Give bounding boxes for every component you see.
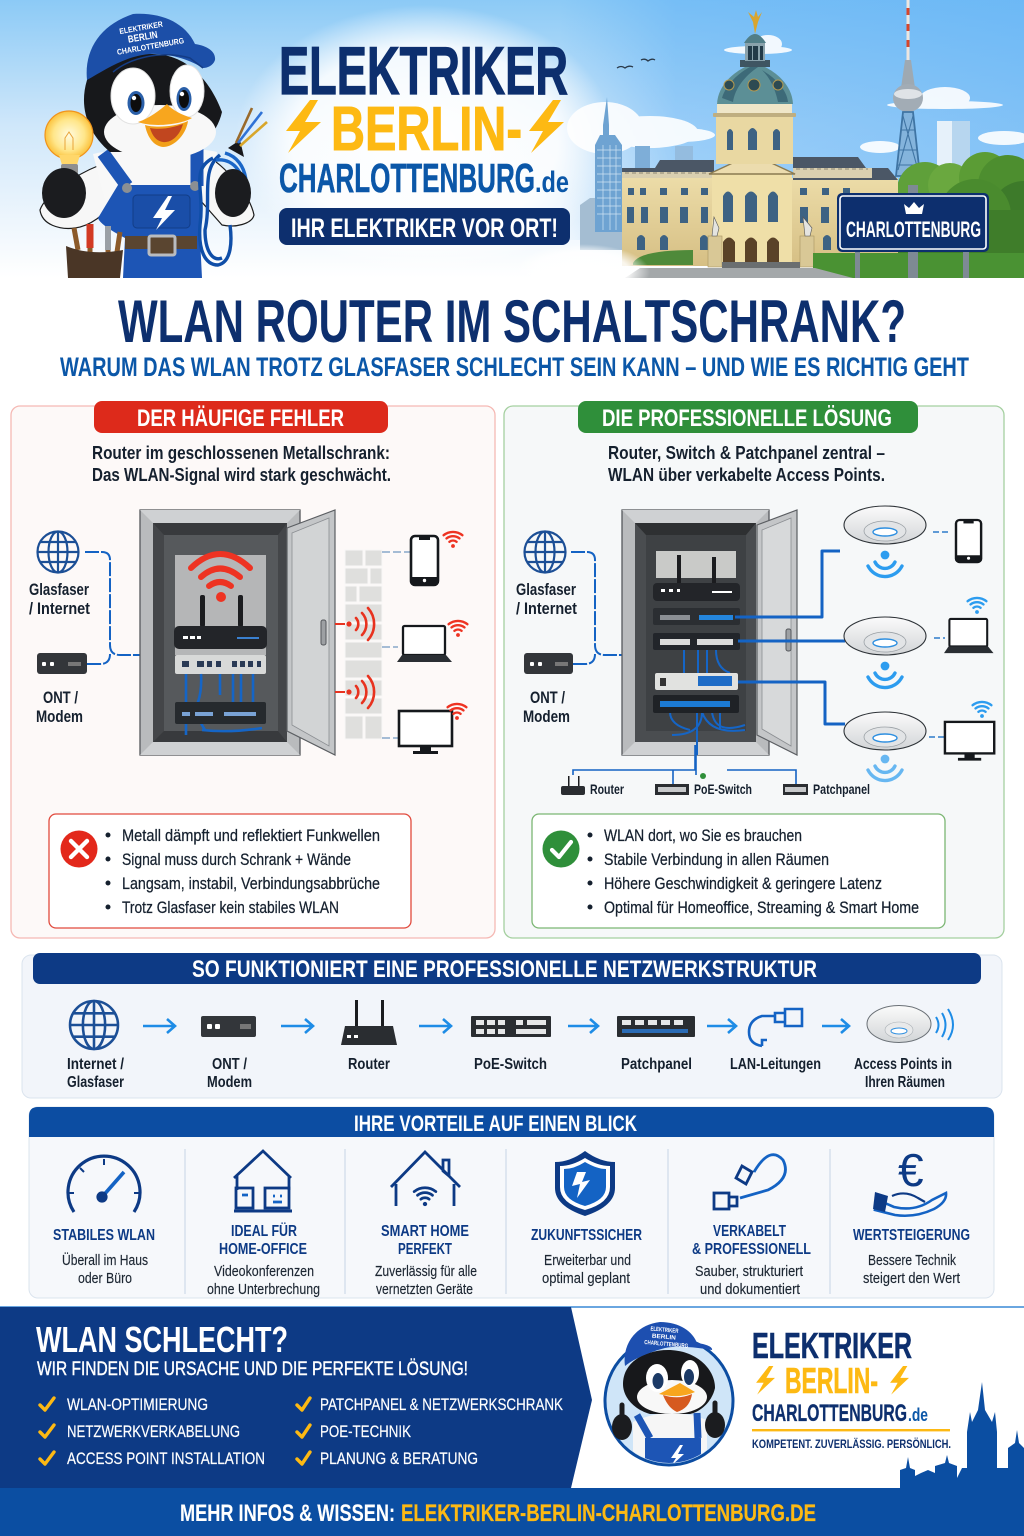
description: [62, 1251, 148, 1287]
heading: & PROFESSIONELL: [692, 1241, 811, 1258]
mansard roofs: [622, 157, 898, 180]
service list right: POE-TECHNIK: [320, 1422, 412, 1441]
heading: [381, 1223, 469, 1258]
clouds: [567, 35, 1024, 154]
description: Zuverlässig für alle: [375, 1263, 477, 1280]
description: optimal geplant: [542, 1270, 631, 1287]
panel: die professionelle Lösung: [504, 401, 1004, 938]
label: Access Points: Access Points in: [854, 1056, 952, 1073]
sky background: [0, 0, 1024, 278]
router with antennas: [174, 595, 267, 649]
bullet list: Optimal für Homeoffice, Streaming & Smart Home: [604, 898, 919, 917]
heading: HOME-OFFICE: [219, 1241, 307, 1258]
panel background: [22, 955, 1002, 1098]
icon: shield: [555, 1151, 615, 1216]
red wifi symbol: [191, 554, 250, 602]
logo: Charlottenburg: CHARLOTTENBURG: [752, 1400, 907, 1427]
castle: [622, 10, 898, 267]
icon: smart home: [391, 1152, 460, 1206]
logo: lightning left: [756, 1366, 775, 1395]
signal 2: [868, 662, 902, 688]
icon: gauge: [68, 1156, 140, 1212]
wing facades: [622, 178, 898, 266]
icon: euro and hand: €: [898, 1144, 924, 1196]
TV tower: [893, 0, 923, 176]
description: vernetzten Geräte: [376, 1281, 473, 1298]
panel: Vorteile: [29, 1107, 994, 1298]
description: [375, 1263, 477, 1298]
metal cabinet: [140, 510, 335, 755]
heading: VERKABELT: [713, 1223, 786, 1240]
icon: wifi phone: [444, 532, 462, 548]
heading: IDEAL FÜR: [231, 1221, 297, 1240]
description: Überall im Haus: [62, 1251, 148, 1269]
logo: lightning right: [529, 100, 564, 153]
cap lettering: ELEKTRIKER: [119, 20, 164, 36]
dark switch: [653, 695, 739, 713]
doors: [723, 238, 779, 262]
penguin mascot: [40, 14, 267, 278]
logo: Elektriker: ELEKTRIKER: [279, 33, 568, 109]
icon: ONT modem: [37, 653, 87, 674]
signal 3: [868, 755, 902, 781]
dome: [717, 67, 793, 104]
badge: der häufige Fehler: [94, 401, 388, 433]
icon: wifi monitor: [448, 704, 466, 720]
icon: Patchpanel: [617, 1016, 695, 1037]
city skyline behind castle: [580, 97, 970, 250]
yellow rule: [752, 1429, 950, 1431]
dashed device lines: [929, 532, 950, 737]
description: [542, 1252, 631, 1287]
service list right: PLANUNG & BERATUNG: [320, 1449, 478, 1468]
Charlottenburg sign: [837, 185, 989, 278]
checkmarks: [40, 1398, 310, 1464]
benefit: Wertsteigerung: [853, 1144, 970, 1287]
description: [695, 1263, 804, 1298]
birds: [617, 59, 655, 68]
logo: .de: .de: [535, 166, 569, 199]
network cabinet: [622, 510, 797, 755]
connection lines: [571, 552, 622, 664]
panel background: [504, 406, 1004, 938]
badge: der häufige Fehler: DER HÄUFIGE FEHLER: [137, 405, 344, 432]
label: ONT / Modem: [207, 1056, 252, 1091]
label: Glasfaser / Internet: / Internet: [29, 599, 90, 618]
blue cables: [186, 674, 262, 735]
door: [757, 510, 797, 755]
website link: ELEKTRIKER-BERLIN-CHARLOTTENBURG.DE: [401, 1500, 816, 1527]
section heading: SO FUNKTIONIERT EINE PROFESSIONELLE NETZWERKSTRUKTUR: [192, 956, 817, 983]
intro text: Das WLAN-Signal wird stark geschwächt.: [92, 465, 391, 485]
badge: die professionelle Lösung: DIE PROFESSIONELLE LÖSUNG: [602, 405, 892, 432]
icon: LAN cable: [749, 1009, 802, 1046]
bullet list: Signal muss durch Schrank + Wände: [122, 850, 351, 869]
label: ONT / Modem: Modem: [207, 1074, 252, 1091]
label: LAN-Leitungen: LAN-Leitungen: [730, 1056, 821, 1073]
light bulb: [45, 111, 93, 174]
icon: PoE-Switch: [471, 1016, 551, 1037]
cap lettering: BERLIN: [127, 30, 159, 46]
bullet list: [588, 826, 919, 917]
central pavilion: [712, 172, 792, 266]
panel background: [11, 406, 495, 938]
intro text: Router, Switch & Patchpanel zentral –: [608, 443, 885, 463]
mascot badge: ELEKTRIKER: [650, 1326, 679, 1335]
bullet list: Höhere Geschwindigkeit & geringere Latenz: [604, 874, 882, 893]
label: Internet / Glasfaser: Internet /: [67, 1056, 124, 1073]
label: ONT / Modem: Modem: [523, 707, 570, 726]
icon: ONT modem: [524, 653, 573, 674]
left glove: [42, 168, 86, 218]
label: ONT / Modem: ONT /: [530, 688, 565, 707]
bullet list: Stabile Verbindung in allen Räumen: [604, 850, 829, 869]
benefit: zukunftssicher: [531, 1151, 642, 1287]
bullet list: Langsam, instabil, Verbindungsabbrüche: [122, 874, 380, 893]
router shelf: [653, 551, 740, 601]
heading: SMART HOME: [381, 1223, 469, 1240]
windows: [627, 128, 868, 250]
callout: problems: [49, 814, 411, 928]
cap: [87, 14, 215, 80]
logo wordmark: [279, 33, 570, 245]
service list left: NETZWERKVERKABELUNG: [67, 1422, 240, 1441]
icon: house with desk: [234, 1151, 292, 1211]
heading: ZUKUNFTSSICHER: [531, 1227, 642, 1244]
switch: [175, 655, 266, 674]
cap lettering: CHARLOTTENBURG: [116, 36, 185, 57]
left sleeve: [40, 165, 115, 228]
bullet list: [106, 826, 380, 917]
benefit: stabiles WLAN: [53, 1156, 155, 1287]
label: ONT / Modem: [523, 688, 570, 726]
brick wall: [345, 550, 382, 739]
icon: monitor: [945, 722, 994, 761]
label: Internet / Glasfaser: Glasfaser: [67, 1074, 124, 1091]
label: Glasfaser / Internet: Glasfaser: [29, 580, 89, 599]
benefit: verkabelt & professionell: [692, 1155, 811, 1298]
description: Videokonferenzen: [214, 1263, 314, 1280]
label: Glasfaser / Internet: [29, 580, 90, 618]
icon: ONT: [201, 1016, 256, 1037]
service list left: [67, 1395, 265, 1468]
bottom link bar: [0, 1488, 1024, 1536]
beak: [145, 121, 188, 147]
service list left: WLAN-OPTIMIERUNG: [67, 1395, 208, 1414]
icon: globe: [38, 532, 78, 572]
badge: die professionelle Lösung: [578, 401, 918, 433]
description: ohne Unterbrechung: [207, 1281, 320, 1298]
intro text: [92, 443, 391, 485]
signal blocked 2: [346, 676, 374, 708]
mascot badge: BERLIN: [652, 1334, 676, 1342]
signal blocked 1: [346, 608, 374, 640]
icon: green check: [542, 830, 580, 868]
right glove: [215, 169, 251, 217]
label: Glasfaser / Internet: / Internet: [516, 599, 577, 618]
logo: Berlin: BERLIN-: [785, 1360, 878, 1401]
label: Glasfaser / Internet: Glasfaser: [516, 580, 576, 599]
icon: phone: [411, 536, 438, 585]
slogan pill: IHR ELEKTRIKER VOR ORT!: [291, 213, 558, 243]
benefit: Smart Home: [375, 1152, 477, 1298]
heading: [692, 1223, 811, 1258]
service list right: PATCHPANEL & NETZWERKSCHRANK: [320, 1395, 564, 1414]
description: Sauber, strukturiert: [695, 1263, 804, 1280]
section heading: IHRE VORTEILE AUF EINEN BLICK: [354, 1111, 637, 1136]
cabinet door: [287, 510, 335, 755]
mascot badge: CHARLOTTENBURG: [644, 1340, 689, 1350]
bullet list: Metall dämpft und reflektiert Funkwellen: [122, 826, 380, 845]
footer top line: [0, 1306, 1024, 1308]
cap lettering: [113, 17, 185, 57]
logo: Berlin: BERLIN-: [331, 95, 522, 164]
label: Access Points: [854, 1056, 952, 1091]
label: ONT / Modem: [36, 688, 83, 726]
heading: STABILES WLAN: [53, 1227, 155, 1244]
bullet list: WLAN dort, wo Sie es brauchen: [604, 826, 802, 845]
icon: access point: [867, 1006, 953, 1042]
gate posts and statues: [708, 217, 814, 267]
intro text: WLAN über verkabelte Access Points.: [608, 465, 885, 485]
panel: Netzwerkstruktur: [22, 953, 1002, 1098]
icon: euro and hand: [873, 1144, 946, 1216]
belt: [125, 236, 197, 249]
dashed device lines: [382, 552, 410, 738]
icon: globe: [524, 532, 566, 572]
hedges, lawn and road: [625, 250, 1024, 278]
switch 1: [653, 608, 740, 625]
eyes: [128, 91, 144, 115]
tool pouch: [74, 224, 120, 252]
description: Erweiterbar und: [544, 1252, 631, 1269]
description: steigert den Wert: [863, 1270, 961, 1287]
slogan pill: [279, 208, 570, 245]
trees: [895, 152, 1024, 260]
icon: cable with plug: [714, 1155, 785, 1209]
headline: WLAN SCHLECHT?: [36, 1319, 288, 1360]
call to action panel: [0, 1307, 592, 1488]
legend: PoE-Switch: PoE-Switch: [694, 781, 752, 797]
drum: [716, 116, 793, 164]
heading: PERFEKT: [398, 1241, 452, 1258]
icon: wifi laptop: [449, 621, 467, 637]
switch 2: [653, 633, 740, 650]
icon: wifi: [973, 702, 991, 718]
panel: der häufige Fehler: [11, 401, 495, 938]
label: Router: Router: [348, 1056, 390, 1073]
left fade into white: [514, 244, 650, 300]
service list right: [320, 1395, 564, 1468]
bullet list: Trotz Glasfaser kein stabiles WLAN: [122, 898, 339, 917]
patch panel: [175, 702, 266, 724]
service list left: ACCESS POINT INSTALLATION: [67, 1449, 265, 1468]
connection lines: [85, 552, 140, 664]
logo: lightning right: [890, 1366, 909, 1395]
icon: wifi: [968, 598, 986, 614]
legend cables: [573, 745, 796, 784]
label: Internet / Glasfaser: [67, 1056, 124, 1091]
icon: router: [341, 1000, 397, 1045]
description: oder Büro: [78, 1270, 132, 1287]
icon: phone: [956, 520, 981, 562]
label: Patchpanel: Patchpanel: [621, 1056, 692, 1073]
uplink cables: [735, 551, 845, 724]
city silhouette: [900, 1382, 1024, 1490]
cable coil: [200, 153, 246, 265]
access point 3: [844, 712, 926, 750]
access point 2: [844, 617, 926, 655]
section heading: [29, 1107, 994, 1137]
overalls: [98, 185, 202, 278]
label: ONT / Modem: ONT /: [212, 1056, 247, 1073]
mascot badge: [605, 1322, 733, 1466]
heading: [219, 1221, 307, 1258]
icon: monitor: [399, 711, 452, 754]
description: [863, 1252, 961, 1287]
label: ONT / Modem: Modem: [36, 707, 83, 726]
head: [84, 54, 222, 152]
legend: Patchpanel: Patchpanel: [813, 781, 870, 797]
label: ONT / Modem: ONT /: [43, 688, 78, 707]
label: Glasfaser / Internet: [516, 580, 577, 618]
light patch panel: [655, 673, 738, 690]
label: PoE-Switch: PoE-Switch: [474, 1056, 547, 1073]
cable wires: [228, 108, 267, 157]
tagline: KOMPETENT. ZUVERLÄSSIG. PERSÖNLICH.: [752, 1436, 951, 1451]
green marker dot: [700, 773, 706, 779]
legend: PoE-Switch: [655, 781, 752, 797]
icon: globe: [70, 1001, 118, 1049]
icon: laptop: [397, 626, 452, 662]
panel background: [29, 1107, 994, 1298]
signal 1: [868, 551, 902, 577]
logo: Charlottenburg: CHARLOTTENBURG: [279, 155, 535, 201]
label: Access Points: Ihren Räumen: [865, 1074, 945, 1091]
legend: Patchpanel: [783, 781, 870, 797]
intro text: Router im geschlossenen Metallschrank:: [92, 443, 390, 463]
cables: [670, 650, 745, 755]
legend: router: [561, 776, 624, 797]
logo: Elektriker: ELEKTRIKER: [752, 1325, 912, 1366]
icon: red cross: [60, 830, 98, 868]
callout: benefits: [532, 814, 945, 928]
description: und dokumentiert: [700, 1281, 801, 1298]
icon: laptop: [944, 619, 994, 653]
arrows: [143, 1019, 849, 1033]
logo: .de: .de: [908, 1405, 928, 1425]
label: Mehr Infos: MEHR INFOS & WISSEN:: [180, 1500, 395, 1527]
footer logo: [752, 1325, 951, 1451]
subheadline: WIR FINDEN DIE URSACHE UND DIE PERFEKTE LÖSUNG!: [37, 1358, 468, 1380]
logo: lightning left: [286, 100, 321, 153]
column dividers: [185, 1149, 830, 1294]
lantern: [740, 60, 770, 67]
legend: router: Router: [590, 781, 624, 797]
signal stubs: [335, 624, 345, 692]
intro text: [608, 443, 885, 485]
description: Bessere Technik: [868, 1252, 956, 1269]
shirt: [93, 148, 217, 200]
right sleeve: [200, 155, 254, 226]
benefit: Home-Office: [207, 1151, 320, 1298]
access point 1: [844, 506, 926, 544]
heading: WERTSTEIGERUNG: [853, 1227, 970, 1244]
description: [207, 1263, 320, 1298]
header banner: [0, 0, 1024, 300]
